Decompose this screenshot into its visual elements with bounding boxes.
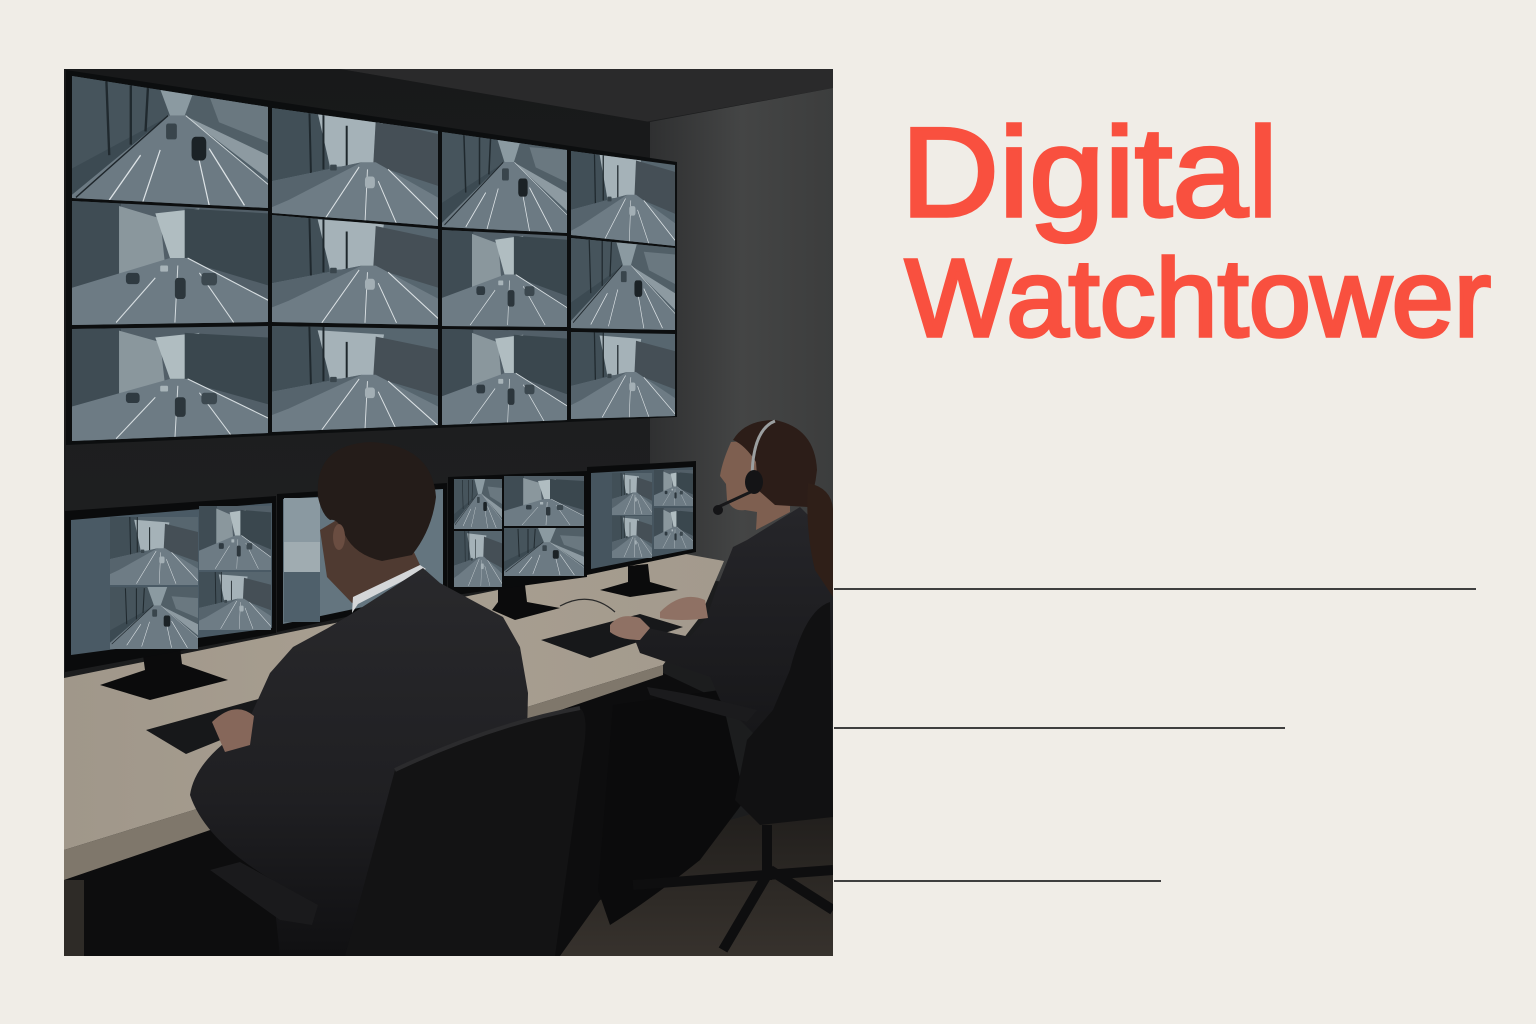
monitor 3: [448, 471, 587, 620]
man chair: [210, 708, 586, 956]
woman ponytail: [807, 483, 833, 597]
screen 1: [72, 76, 268, 208]
man collar: [352, 565, 426, 613]
woman chair base: [664, 825, 833, 952]
woman legs: [598, 690, 745, 925]
leader line 2: [834, 727, 1285, 729]
woman hands: [610, 597, 708, 640]
keyboard: woman: [541, 614, 683, 658]
leader line 1: [834, 588, 1476, 590]
monitor 1: [65, 496, 276, 700]
woman neck and face: [720, 440, 790, 530]
woman operator: [598, 420, 833, 950]
desk: [64, 553, 724, 956]
under desk shadow: [64, 673, 720, 956]
man jacket: [190, 568, 528, 956]
screen 6: [272, 215, 438, 325]
man hand: [212, 709, 254, 752]
woman chair back: [735, 602, 833, 825]
screen 5: [72, 201, 268, 325]
video wall: [66, 70, 677, 445]
screen 2: [272, 108, 438, 226]
screen 12: [571, 332, 675, 419]
side wall: [650, 88, 833, 600]
woman armrest: [647, 687, 726, 716]
man operator: [190, 484, 528, 916]
headset: [752, 421, 775, 480]
screen 3: [442, 132, 567, 233]
monitor 2: [277, 483, 447, 632]
keyboard: man: [146, 699, 258, 754]
leader line 3: [834, 880, 1161, 882]
man neck: [320, 515, 420, 603]
back wall: [399, 79, 646, 122]
screen 7: [442, 230, 567, 327]
woman hair: [733, 420, 817, 507]
screen 4: [571, 151, 675, 246]
cables: [560, 599, 615, 612]
screen 9: [72, 326, 268, 441]
floor: [560, 830, 833, 956]
man hair: [318, 442, 436, 561]
monitor 4: [587, 461, 696, 597]
screen 8: [571, 238, 675, 330]
title: [901, 101, 1491, 360]
man ear: [333, 524, 345, 550]
photo: surveillance control room: [64, 69, 833, 956]
screen 10: [272, 326, 438, 432]
ceiling: [342, 69, 833, 122]
woman jacket: [636, 507, 833, 702]
screen 11: [442, 329, 567, 425]
title line 2: Watchtower: [905, 237, 1491, 360]
title line 1: Digital: [901, 101, 1278, 243]
